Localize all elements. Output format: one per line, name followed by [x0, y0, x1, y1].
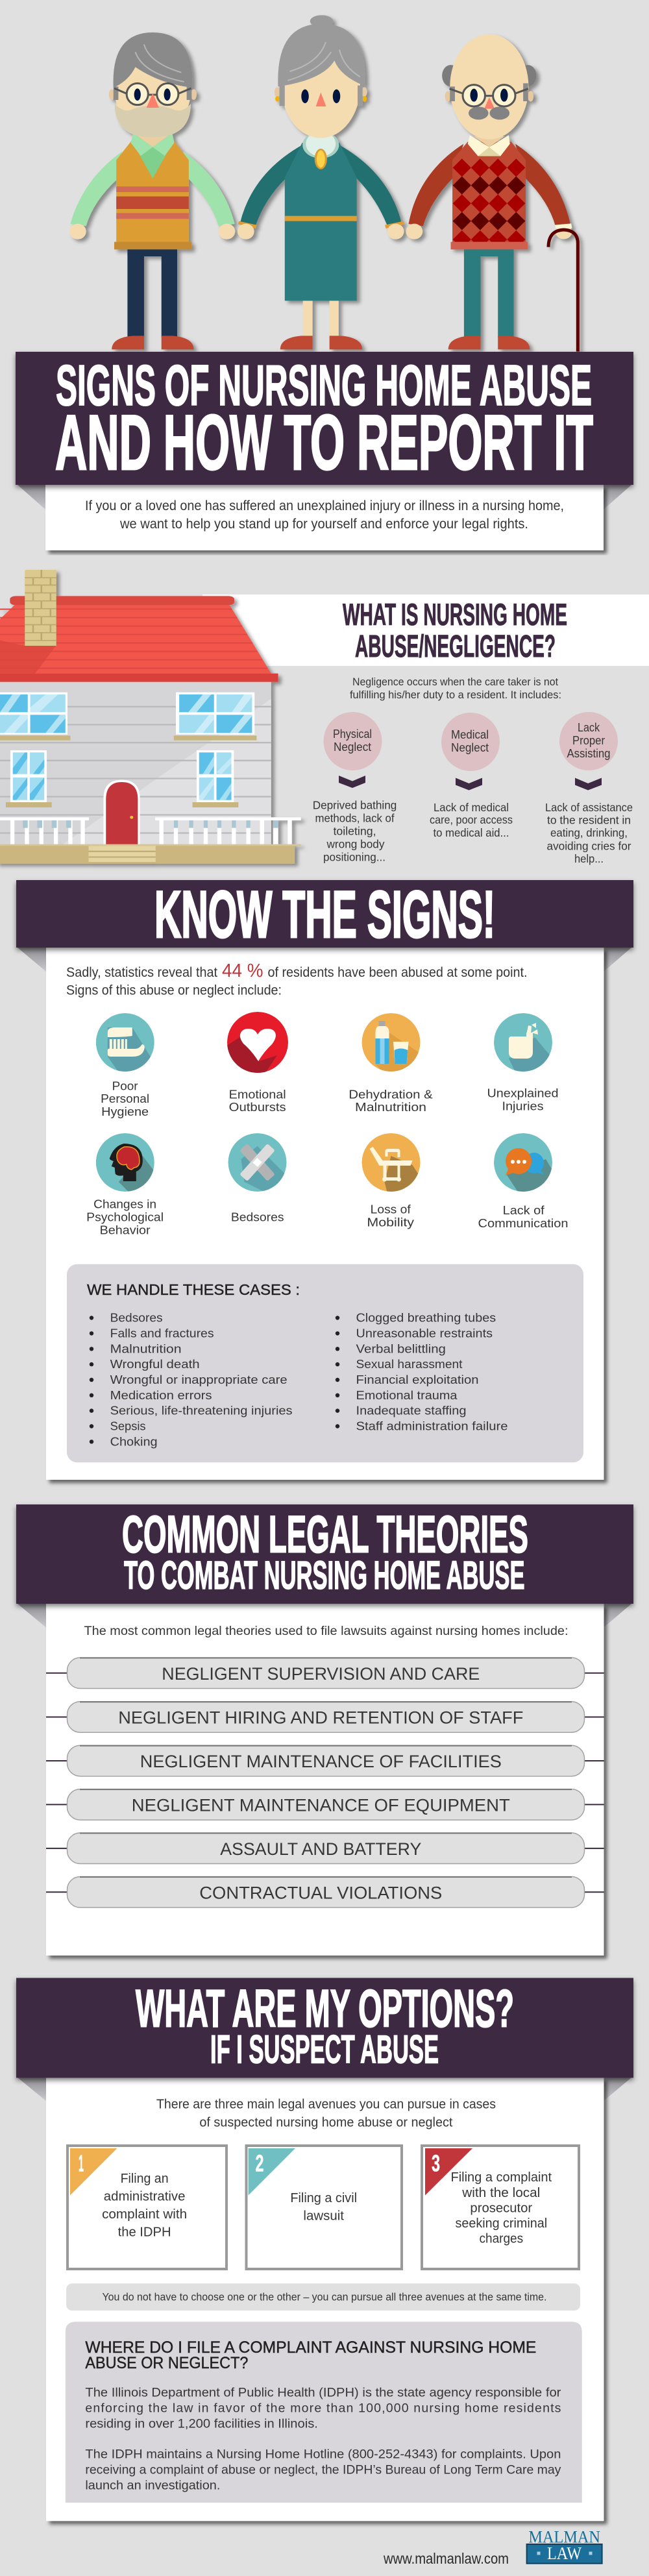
description: to the resident in: [547, 814, 631, 827]
connector lines: [46, 1673, 604, 1892]
theory pill: contractual violations: [67, 1877, 584, 1907]
oval label: Physical: [333, 728, 372, 741]
figure: woman in teal dress: [238, 15, 404, 349]
option card 3: with the local: [461, 2186, 540, 2200]
description: [545, 801, 633, 865]
option card 3: prosecutor: [470, 2202, 532, 2216]
oval label: [567, 721, 610, 760]
logo: Malman Law: LAW: [547, 2544, 582, 2563]
option card 3: [422, 2146, 579, 2269]
list: right column: Clogged breathing tubes: [356, 1312, 496, 1325]
option card 1: Filing an: [121, 2172, 169, 2186]
statistic text: 44 %: [222, 961, 263, 981]
box heading: WE HANDLE THESE CASES :: [87, 1281, 300, 1298]
list: left column: Sepsis: [110, 1420, 146, 1433]
paragraph: hotline: [85, 2447, 561, 2493]
option card 2: 2: [256, 2150, 263, 2177]
list: right column: Financial exploitation: [356, 1373, 479, 1386]
header panel: intro text card: [18, 485, 631, 550]
intro text: The most common legal theories used to file lawsuits against nursing homes include:: [84, 1624, 569, 1638]
icon: crossed bandages, bedsores: [228, 1133, 287, 1192]
description: [430, 801, 513, 839]
sign labels: Unexplained: [487, 1086, 558, 1100]
option card 1: 1: [79, 2150, 84, 2177]
oval: physical neglect: [323, 712, 382, 770]
sign labels: Malnutrition: [355, 1100, 426, 1114]
porch deck and steps: [0, 844, 301, 864]
theory pill: contractual violations: CONTRACTUAL VIOLATIONS: [199, 1883, 442, 1903]
fold triangles: [18, 485, 631, 509]
list: right column: Unreasonable restraints: [356, 1327, 493, 1340]
banner: what are my options: [16, 1978, 633, 2078]
box: we handle these cases: [67, 1264, 583, 1462]
list: left column: Malnutrition: [110, 1342, 182, 1355]
description: help...: [574, 852, 604, 865]
fold triangles: [18, 948, 631, 972]
statistic text: Signs of this abuse or neglect include:: [66, 983, 282, 998]
description: to medical aid...: [434, 826, 509, 839]
note box: all three avenues: [66, 2283, 580, 2311]
figure: man with vest and beard: [69, 32, 235, 349]
oval label: Proper: [572, 734, 605, 747]
heading: what is negligence: [343, 597, 567, 664]
option card 1: administrative: [104, 2190, 185, 2204]
option card 2: [247, 2146, 402, 2269]
banner title: [136, 1980, 514, 2072]
theory pill: negligent supervision: [67, 1658, 584, 1689]
arrow chevron: [456, 778, 482, 791]
intro text: There are three main legal avenues you can pursue in cases: [156, 2098, 496, 2112]
option card 3: Filing a complaint: [450, 2170, 552, 2185]
box: where do I file a complaint: [66, 2322, 582, 2503]
icon: water bottle and glass, dehydration: [362, 1013, 421, 1072]
list: right column: Verbal belittling: [356, 1342, 446, 1355]
option card 1: [67, 2146, 227, 2269]
list: left column: Medication errors: [110, 1389, 212, 1402]
description: [313, 799, 397, 864]
option card 3: charges: [479, 2232, 523, 2246]
fold triangles: [18, 2078, 631, 2101]
theory pill: negligent hiring: NEGLIGENT HIRING AND RETENTION OF STAFF: [118, 1708, 523, 1728]
description: Lack of assistance: [545, 801, 633, 814]
paragraph: IDPH role: enforcing the law in favor of the more than 100,000 nursing home residents: [85, 2401, 561, 2416]
intro text: of suspected nursing home abuse or neglect: [199, 2115, 453, 2129]
statistic text: Sadly, statistics reveal that: [66, 965, 217, 980]
banner: common legal theories: [16, 1504, 633, 1604]
door: [103, 780, 140, 845]
box heading: ABUSE OR NEGLECT?: [85, 2354, 248, 2372]
icon: wheelchair, loss of mobility: [362, 1133, 421, 1192]
description: toileting,: [334, 825, 376, 838]
option card 3: 3: [432, 2150, 440, 2177]
window: lower right: [193, 750, 238, 807]
sign labels: Hygiene: [101, 1105, 149, 1118]
theory pill: negligent hiring: [67, 1702, 584, 1732]
option card 3: seeking criminal: [456, 2216, 547, 2231]
statistic text: [66, 961, 527, 998]
panel: what is nursing home abuse heading band: [202, 595, 649, 666]
theory pill: assault and battery: ASSAULT AND BATTERY: [220, 1839, 421, 1859]
neglect type: medical: [430, 713, 513, 839]
description: positioning...: [323, 851, 386, 864]
neglect type: physical: [313, 712, 397, 864]
oval label: Assisting: [567, 747, 610, 760]
description: wrong body: [326, 838, 385, 851]
sign labels: Behavior: [100, 1223, 151, 1237]
panel: know the signs: [18, 948, 631, 1480]
list: left column: Bedsores: [110, 1312, 163, 1325]
list: right column: Inadequate staffing: [356, 1405, 466, 1417]
list: right column: Emotional trauma: [356, 1389, 458, 1402]
paragraph: IDPH role: [85, 2386, 561, 2431]
theory pill: negligent maintenance of facilities: NEGLIGENT MAINTENANCE OF FACILITIES: [140, 1752, 502, 1771]
oval label: Lack: [578, 721, 600, 734]
list: left column: Falls and fractures: [110, 1327, 214, 1340]
house wall: [0, 680, 271, 846]
logo: Malman Law: [527, 2527, 602, 2564]
arrow chevron: [575, 778, 602, 791]
sign labels: Lack of: [503, 1203, 545, 1217]
description: Lack of medical: [434, 801, 509, 814]
sign labels: Mobility: [367, 1215, 415, 1229]
list: left column: Choking: [110, 1435, 158, 1448]
paragraph: hotline: receiving a complaint of abuse or neglect, the IDPH’s Bureau of Long Term Care may: [85, 2463, 561, 2477]
paragraph: IDPH role: residing in over 1,200 facilities in Illinois.: [85, 2417, 318, 2431]
box heading: WHERE DO I FILE A COMPLAINT AGAINST NURSING HOME: [85, 2338, 536, 2357]
description: Deprived bathing: [313, 799, 397, 812]
list: left column: [90, 1312, 293, 1448]
title text: [55, 353, 593, 486]
window: lower left: [6, 750, 52, 807]
oval label: Neglect: [334, 741, 371, 754]
intro text: [156, 2098, 496, 2129]
negligence explanation text: [350, 676, 561, 701]
option card 1: complaint with: [102, 2207, 187, 2222]
icon: toothbrush, poor hygiene: [96, 1013, 154, 1072]
sign labels: Dehydration &: [349, 1088, 433, 1101]
box heading: [85, 2338, 536, 2372]
description: care, poor access: [430, 813, 513, 826]
panel: common legal theories: [18, 1604, 631, 1956]
window: upper left: [0, 693, 70, 741]
negligence explanation text: Negligence occurs when the care taker is not: [352, 676, 558, 688]
theory pill: negligent maintenance of facilities: [67, 1745, 584, 1776]
description: avoiding cries for: [546, 840, 631, 853]
paragraph: hotline: The IDPH maintains a Nursing Home Hotline (800-252-4343) for complaints. Upon: [85, 2447, 561, 2462]
theory pill: negligent maintenance of equipment: NEGLIGENT MAINTENANCE OF EQUIPMENT: [132, 1796, 510, 1815]
banner title: [122, 1506, 528, 1597]
window: upper right: [174, 693, 256, 741]
chimney: [25, 570, 56, 646]
statistic text: of residents have been abused at some point.: [267, 965, 527, 980]
icon: speech bubbles, lack of communication: [494, 1133, 552, 1192]
sign labels: Bedsores: [231, 1210, 284, 1224]
illustration: nursing home house: [0, 570, 301, 864]
roof: [0, 596, 278, 682]
list: right column: Sexual harassment: [356, 1358, 462, 1371]
icon: heart, emotional outbursts: [227, 1012, 288, 1075]
sign labels: [86, 1079, 569, 1237]
title banner: [16, 352, 633, 486]
banner: know the signs: [16, 877, 633, 951]
theory pill: assault and battery: [67, 1833, 584, 1864]
neglect type: lack of proper assisting: [545, 712, 633, 865]
icon: bandaged finger, unexplained injuries: [494, 1013, 552, 1072]
negligence explanation text: fulfilling his/her duty to a resident. It includes:: [350, 689, 561, 701]
sign labels: Emotional: [229, 1088, 286, 1101]
option card 2: lawsuit: [303, 2209, 344, 2224]
list: left column: Wrongful or inappropriate care: [110, 1373, 288, 1386]
sign labels: Injuries: [502, 1099, 544, 1113]
sign labels: Changes in: [93, 1197, 156, 1211]
oval label: Neglect: [451, 741, 489, 754]
panel: what are my options: [18, 2078, 631, 2521]
icon: head with brain, psychological changes: [96, 1133, 158, 1195]
list: right column: [336, 1312, 508, 1433]
sign labels: Communication: [478, 1216, 569, 1230]
intro text: [85, 498, 564, 532]
logo: Malman Law: MALMAN: [528, 2527, 600, 2546]
paragraph: hotline: launch an investigation.: [85, 2479, 220, 2493]
description: eating, drinking,: [550, 826, 628, 839]
paragraph: IDPH role: The Illinois Department of Public Health (IDPH) is the state agency responsible for: [85, 2386, 561, 2400]
description: methods, lack of: [315, 812, 395, 825]
theory pill: negligent maintenance of equipment: [67, 1789, 584, 1820]
oval label: Medical: [451, 728, 489, 741]
sign labels: Psychological: [86, 1210, 164, 1224]
intro text: we want to help you stand up for yourself and enforce your legal rights.: [119, 517, 528, 532]
illustration: three elderly people holding hands: [69, 15, 578, 352]
list: left column: Wrongful death: [110, 1358, 200, 1371]
footer website: www.malmanlaw.com: [383, 2550, 509, 2567]
sign labels: Outbursts: [229, 1100, 286, 1114]
sign labels: Personal: [101, 1092, 149, 1105]
banner title: IF I SUSPECT ABUSE: [210, 2028, 439, 2072]
porch railings: [0, 817, 301, 845]
fold triangles: [18, 1604, 631, 1628]
oval label: [451, 728, 489, 754]
sign labels: Loss of: [371, 1202, 411, 1216]
sign labels: Poor: [112, 1079, 138, 1093]
oval: lack proper assisting: [559, 712, 618, 770]
option card 1: the IDPH: [118, 2226, 171, 2240]
intro text: If you or a loved one has suffered an unexplained injury or illness in a nursing home,: [85, 498, 564, 513]
note box: all three avenues: You do not have to choose one or the other – you can pursue all three avenues at the same time.: [103, 2291, 546, 2303]
theory pill: negligent supervision: NEGLIGENT SUPERVISION AND CARE: [162, 1664, 480, 1684]
oval: medical neglect: [441, 713, 500, 771]
oval label: [333, 728, 372, 754]
option card 2: Filing a civil: [290, 2191, 357, 2205]
list: left column: Serious, life-threatening injuries: [110, 1405, 293, 1417]
figure: bald man with argyle sweater and cane: [406, 34, 578, 352]
arrow chevron: [339, 776, 365, 788]
list: right column: Staff administration failure: [356, 1420, 508, 1433]
